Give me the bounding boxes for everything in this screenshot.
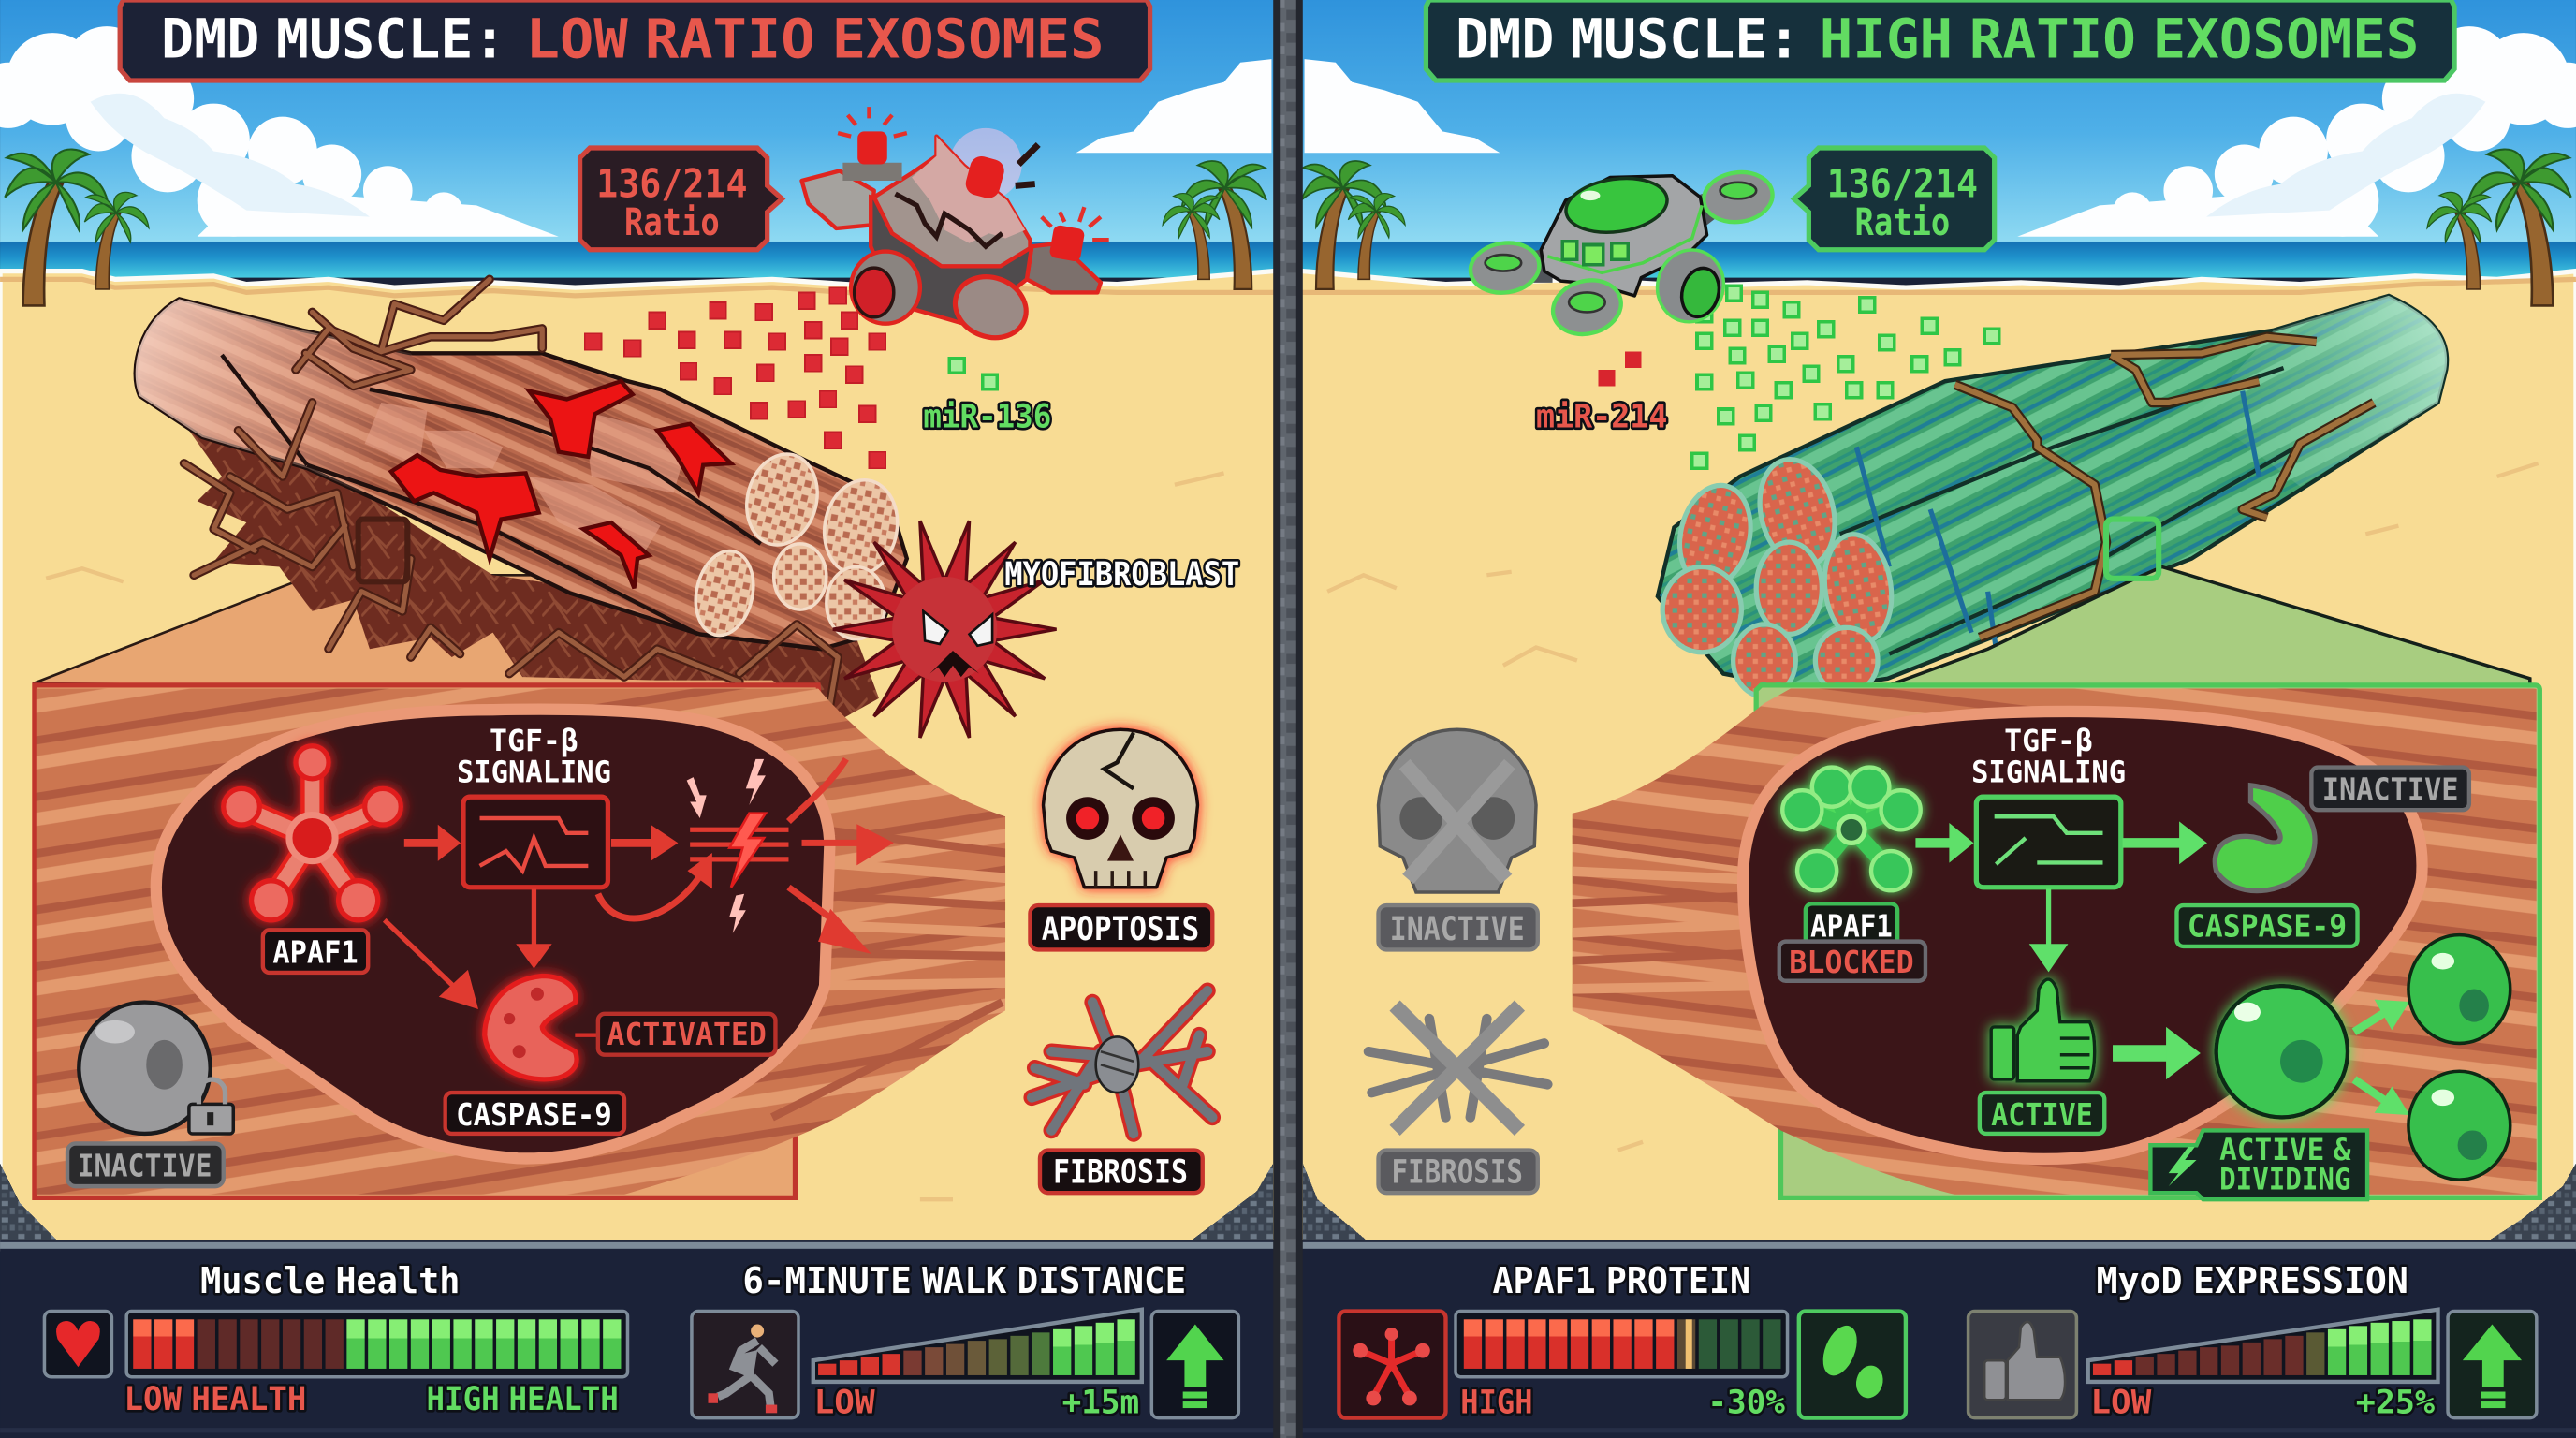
icon: daughter cell bottom xyxy=(2408,1071,2510,1180)
metric: muscle health: Muscle Health xyxy=(200,1260,460,1302)
bands xyxy=(1856,391,2259,649)
myofibroblast xyxy=(833,521,1057,738)
inset frame xyxy=(1756,685,2539,1197)
miR-136 particles xyxy=(949,359,997,389)
shoreline wet sand xyxy=(0,279,2576,296)
heading: TGF-beta signaling xyxy=(1971,725,2126,789)
icon: inactive ball with lock xyxy=(79,1003,233,1134)
label: fibrosis: FIBROSIS xyxy=(1053,1153,1188,1192)
cloud: left panel large xyxy=(0,26,559,237)
metric: muscle health: LOW HEALTH xyxy=(124,1380,306,1418)
miR-214 particles xyxy=(1599,352,1641,386)
label: inactive: INACTIVE xyxy=(2322,771,2458,808)
label: APAF1: APAF1 xyxy=(272,933,359,970)
arrows: signaling flow xyxy=(1915,827,2405,1112)
label: activated: ACTIVATED xyxy=(607,1016,767,1052)
label: inactive: INACTIVE xyxy=(1390,910,1525,948)
muscle pale end xyxy=(2202,296,2447,486)
exosome particles: low ratio xyxy=(585,287,886,468)
icon: runner xyxy=(692,1312,798,1418)
dashboard top rail xyxy=(0,1242,2576,1249)
arrows: signaling flow xyxy=(385,759,889,1005)
metric: APAF1 protein: HIGH xyxy=(1460,1383,1532,1421)
muscle bundle: healthy high ratio xyxy=(1658,296,2447,690)
dome xyxy=(1562,172,1671,239)
title banner: high ratio: DMD MUSCLE: xyxy=(1456,7,1801,70)
zoom cone: left xyxy=(33,575,829,690)
signaling box xyxy=(1976,797,2121,888)
outcome: apoptosis skull xyxy=(1044,729,1197,888)
metric: MyoD expression: MyoD EXPRESSION xyxy=(2096,1260,2408,1302)
lower hull xyxy=(871,198,1032,325)
zoom marker: right xyxy=(2106,520,2159,579)
shattered pink shell xyxy=(912,137,1025,243)
sand ripples xyxy=(46,463,2539,1199)
label: miR-214: miR-214 xyxy=(1536,397,1667,435)
lower pod xyxy=(946,267,1034,347)
metric: muscle health xyxy=(44,1260,627,1418)
dashboard lower rail xyxy=(0,1428,2576,1432)
metric: 6-minute walk distance: 6-MINUTE WALK DISTANCE xyxy=(742,1260,1186,1302)
glow xyxy=(949,128,1022,200)
background: sky xyxy=(0,0,2576,243)
icon: daughter cell top xyxy=(2408,935,2510,1043)
inset panel: high ratio cell xyxy=(1560,674,2546,1216)
hull xyxy=(1541,176,1707,296)
icon: heart xyxy=(44,1312,111,1377)
upper hull xyxy=(874,137,1030,266)
metric: 6-minute walk distance: LOW xyxy=(814,1383,875,1421)
eyes xyxy=(923,611,992,646)
palm trees: right panel xyxy=(1301,149,2571,305)
label: caspase-9: CASPASE-9 xyxy=(2188,907,2347,944)
exosome ship: damaged xyxy=(802,107,1109,347)
fibre bundle seams xyxy=(222,355,761,634)
callout: right ratio: 136/214 xyxy=(1827,161,1978,207)
heading: TGF-beta signaling: TGF-β xyxy=(490,725,578,758)
label: active and dividing: ACTIVE & xyxy=(2219,1134,2351,1167)
label: apoptosis: APOPTOSIS xyxy=(1042,910,1199,948)
label: APAF1 blocked xyxy=(1779,903,1925,981)
title banner: high ratio xyxy=(1426,0,2454,81)
metric: MyoD expression xyxy=(1969,1260,2537,1421)
bottom dashboard bar xyxy=(0,1240,2576,1438)
fibrosis tendrils light xyxy=(184,279,838,707)
metric: 6-minute walk distance xyxy=(692,1260,1238,1421)
cloud: right panel large xyxy=(2017,26,2576,237)
alarm sparks xyxy=(838,107,1109,240)
bottom pod xyxy=(1547,273,1627,342)
zoom marker: left xyxy=(359,520,407,581)
green hull stripe xyxy=(1547,205,1702,272)
outcome: inactive skull crossed xyxy=(1379,729,1536,892)
metric: APAF1 protein: -30% xyxy=(1707,1383,1785,1421)
ramp bar xyxy=(2088,1310,2438,1382)
label: caspase-9: CASPASE-9 xyxy=(456,1096,612,1133)
metric: MyoD expression: +25% xyxy=(2356,1383,2435,1421)
cloud: right panel small xyxy=(1305,59,1500,153)
label: APAF1 blocked: BLOCKED xyxy=(1789,944,1914,980)
left wing xyxy=(802,171,874,228)
tissue xyxy=(1560,674,2546,1216)
label: miR-136: miR-136 xyxy=(923,397,1051,435)
exosome ship: healthy xyxy=(1468,168,1776,342)
label: fibrosis: FIBROSIS xyxy=(1392,1153,1523,1192)
top right pod xyxy=(1701,168,1776,227)
icon: gray thumbs up xyxy=(1969,1312,2076,1418)
fibre seams xyxy=(1840,368,2324,654)
icon: red APAF1 xyxy=(1339,1312,1445,1418)
callout: left ratio: 136/214 xyxy=(596,161,748,207)
label: active and dividing xyxy=(2150,1130,2367,1199)
vessels dark xyxy=(1955,337,2374,638)
title banner: low ratio: DMD MUSCLE: xyxy=(161,7,506,70)
muscle bundle: damaged low ratio xyxy=(136,279,907,723)
heading: TGF-beta signaling xyxy=(457,725,611,789)
end caps xyxy=(688,447,905,640)
tears xyxy=(391,381,731,588)
label: APAF1 blocked: APAF1 xyxy=(1810,907,1893,944)
outcome: fibrosis barbed wire xyxy=(1032,990,1212,1134)
beacon base xyxy=(842,163,902,181)
health bar xyxy=(126,1312,627,1377)
label: inactive: INACTIVE xyxy=(78,1148,212,1184)
icon: green fragments xyxy=(1799,1312,1906,1418)
icon: caspase-9 inactive xyxy=(2215,785,2315,891)
struts xyxy=(1519,189,1721,283)
metric: MyoD expression: LOW xyxy=(2090,1383,2152,1421)
icon: APAF1 blocked xyxy=(1782,768,1921,890)
fibrosis tendrils dark xyxy=(184,279,838,707)
fibrosis mass beneath muscle xyxy=(189,431,879,723)
icon: thumbs up xyxy=(1991,979,2095,1081)
ramp bar xyxy=(813,1310,1142,1382)
callout: left ratio xyxy=(580,148,782,250)
heading: TGF-beta signaling: TGF-β xyxy=(2004,725,2093,758)
inset frame and fill xyxy=(35,685,822,1197)
callout: right ratio: Ratio xyxy=(1854,200,1950,244)
cloud: left panel small xyxy=(1076,59,1271,153)
rocks: corner stones xyxy=(0,1164,2576,1240)
outcome: fibrosis crossed xyxy=(1368,1005,1547,1130)
crack xyxy=(896,194,1003,246)
muscle pale end xyxy=(136,299,444,493)
vessels xyxy=(1955,337,2374,638)
windows xyxy=(1562,242,1628,265)
icon: up arrow xyxy=(1151,1312,1238,1418)
exosome particles: high ratio xyxy=(1692,286,1999,468)
engine xyxy=(851,252,920,324)
cell interior xyxy=(156,710,829,1158)
icon: lightning and damage xyxy=(687,759,788,933)
label: active and dividing: DIVIDING xyxy=(2219,1164,2351,1197)
mouth xyxy=(929,651,979,677)
protein bar xyxy=(1456,1312,1788,1377)
muscle body xyxy=(136,299,907,649)
muscle body xyxy=(1658,296,2447,690)
metric: APAF1 protein xyxy=(1339,1260,1906,1421)
callout: right ratio xyxy=(1794,148,1995,250)
pale fibre segments xyxy=(365,403,690,559)
icon: active satellite cell xyxy=(2217,986,2348,1117)
metric: APAF1 protein: APAF1 PROTEIN xyxy=(1493,1260,1750,1302)
engine xyxy=(1649,242,1732,330)
center divider xyxy=(1273,0,1303,1438)
icon: APAF1 activated xyxy=(224,746,401,920)
left pod xyxy=(1468,239,1543,297)
signaling box xyxy=(463,797,607,888)
background: sea xyxy=(0,242,2576,278)
engine core xyxy=(855,268,894,317)
zoom cone: right xyxy=(1781,566,2530,1183)
inset panel: low ratio cell xyxy=(33,674,1018,1216)
cell interior xyxy=(1743,712,2422,1159)
title banner: low ratio xyxy=(120,0,1150,81)
callout: left ratio: Ratio xyxy=(624,200,720,244)
debris xyxy=(1016,144,1038,185)
title banner: low ratio: LOW RATIO EXOSOMES xyxy=(526,7,1104,70)
beacons xyxy=(857,131,1085,262)
label: active: ACTIVE xyxy=(1991,1096,2093,1133)
heading: TGF-beta signaling: SIGNALING xyxy=(1971,756,2126,789)
right arm xyxy=(1027,243,1101,292)
title banner: high ratio: HIGH RATIO EXOSOMES xyxy=(1820,7,2419,70)
tissue xyxy=(33,674,1018,1216)
heading: TGF-beta signaling: SIGNALING xyxy=(457,756,611,789)
end caps: right muscle xyxy=(1662,451,1898,697)
icon: caspase-9 activated xyxy=(485,976,577,1079)
background: sand beach xyxy=(0,271,2576,1249)
metric: 6-minute walk distance: +15m xyxy=(1062,1383,1139,1421)
palm trees: left panel xyxy=(5,149,1266,305)
metric: muscle health: HIGH HEALTH xyxy=(426,1380,619,1418)
label: myofibroblast: MYOFIBROBLAST xyxy=(1004,555,1239,594)
icon: up arrow xyxy=(2448,1312,2537,1418)
